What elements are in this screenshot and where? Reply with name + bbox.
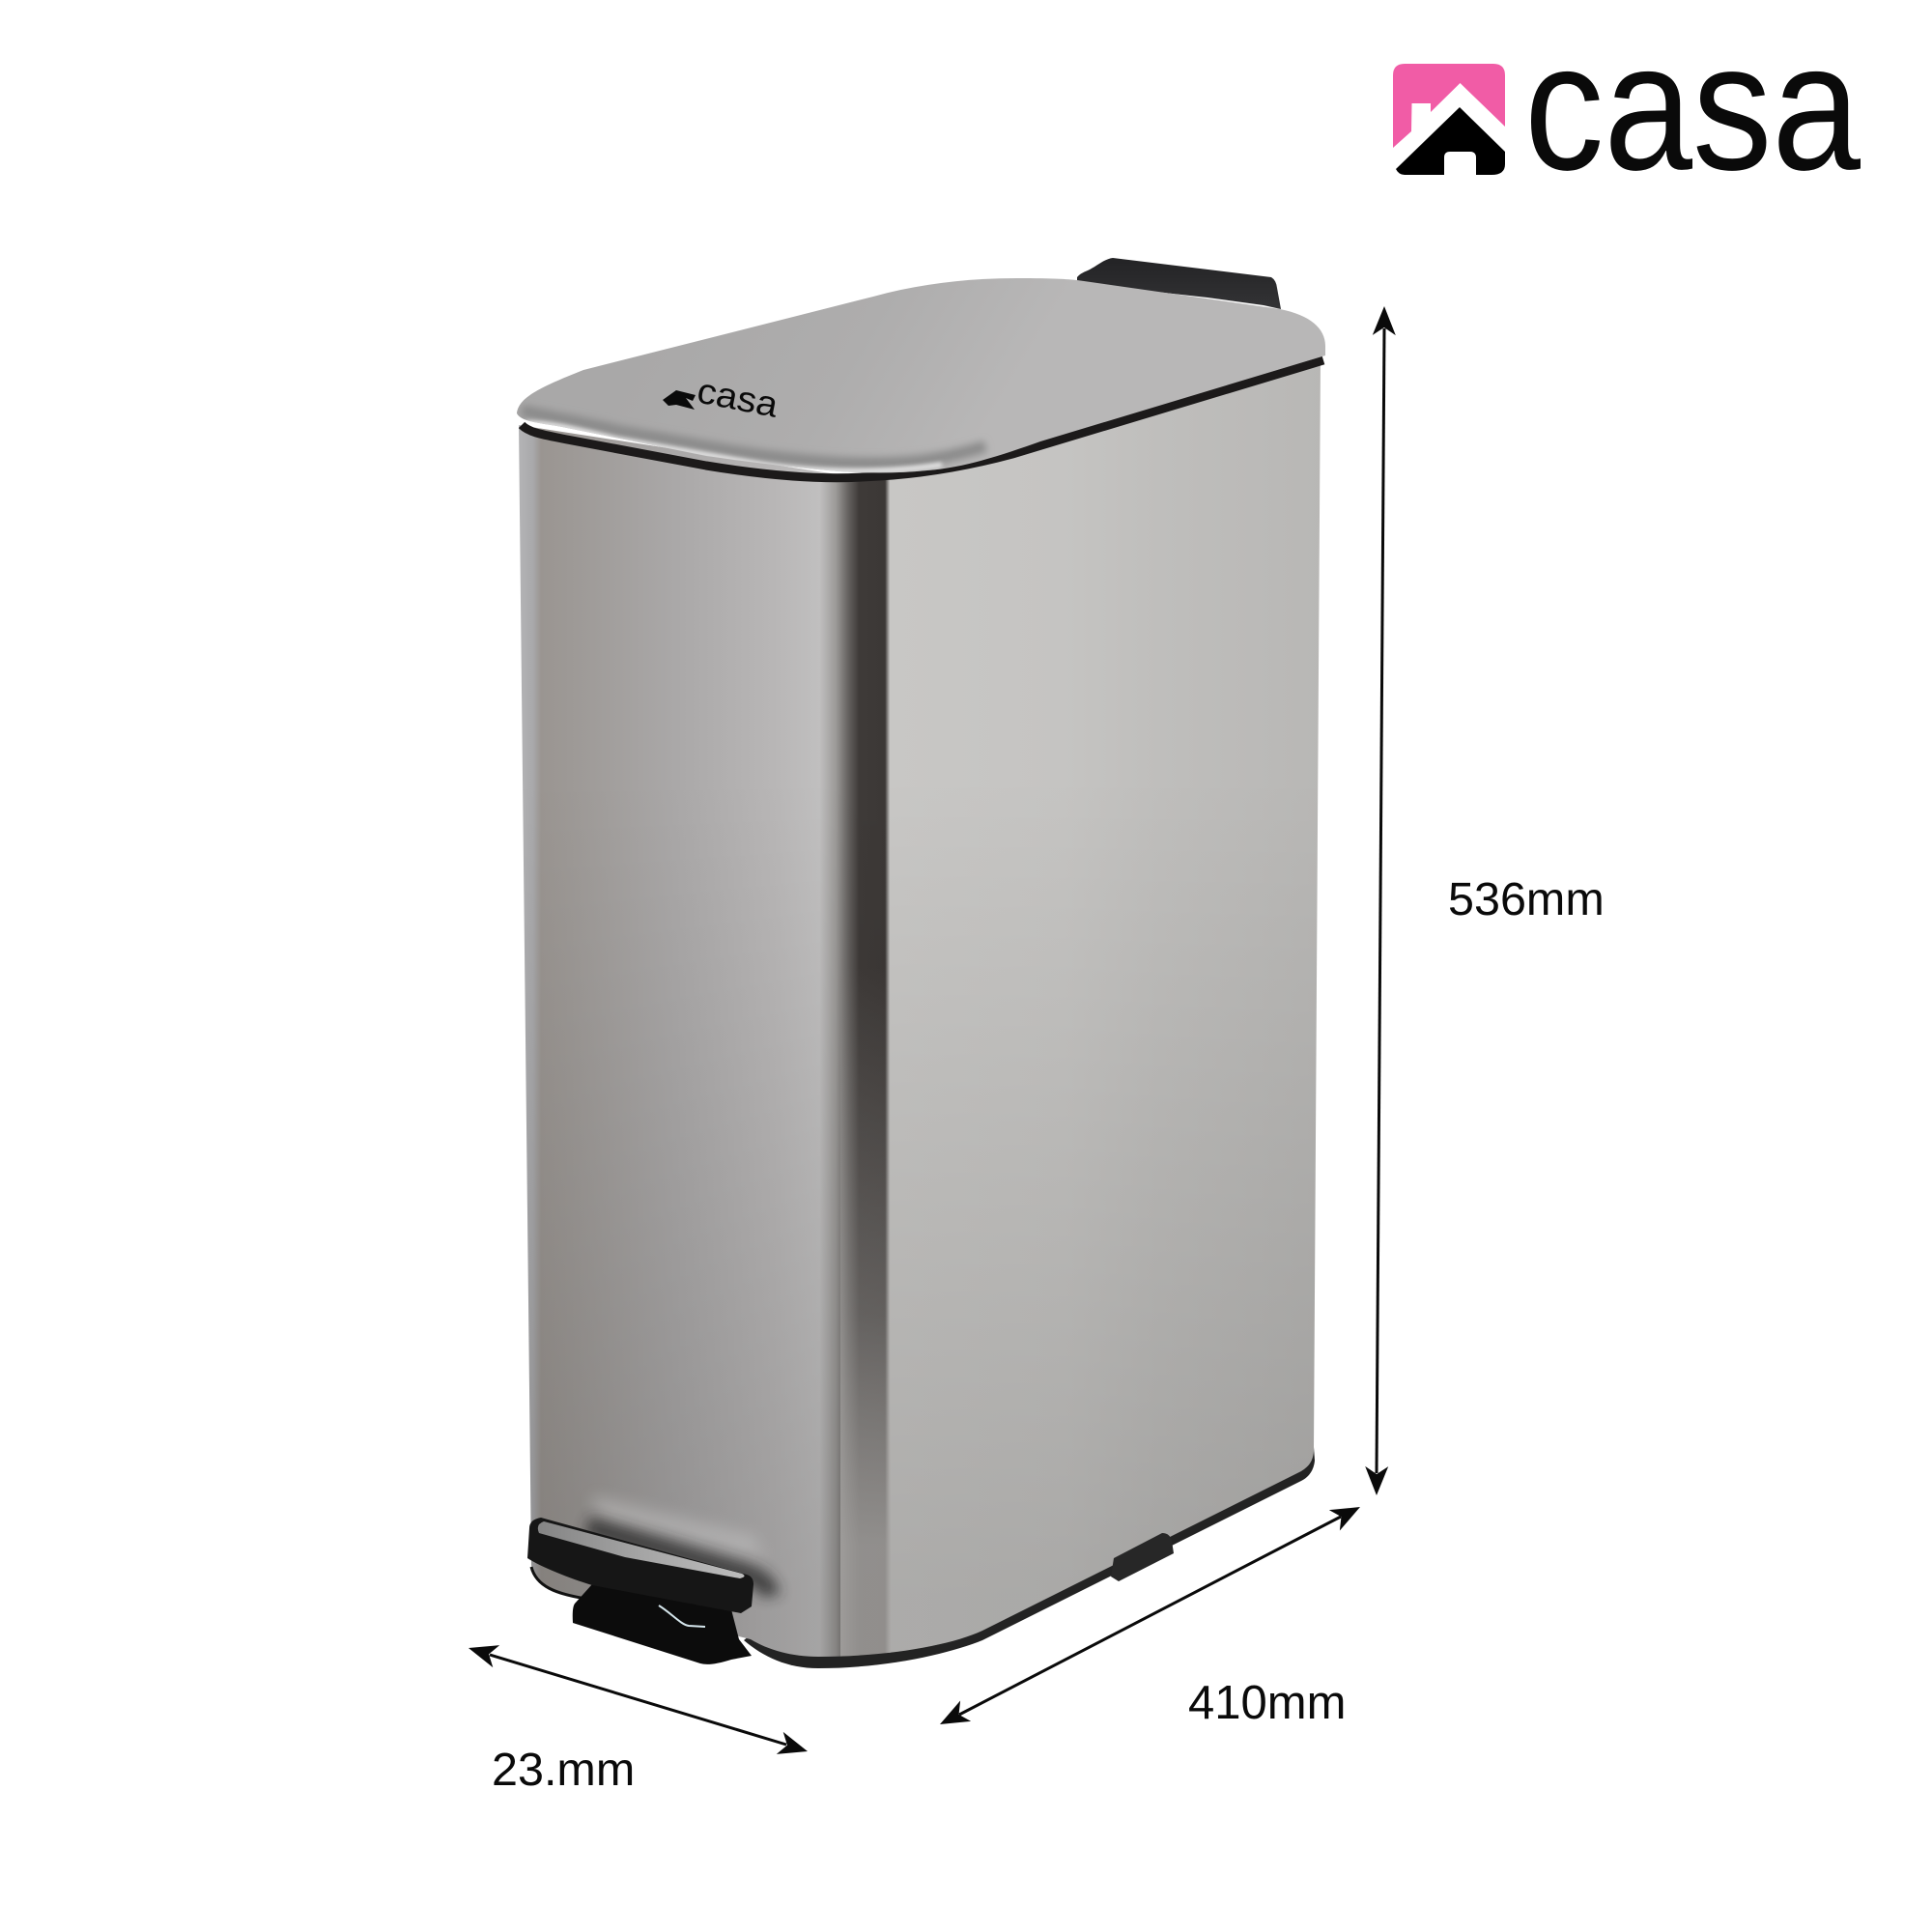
bin body (519, 359, 1321, 1662)
label: height: 536mm (1448, 873, 1605, 925)
dimension arrow: depth (466, 1637, 810, 1762)
bottom foot stop (1111, 1533, 1174, 1581)
lid logo wordmark: casa (694, 371, 781, 425)
pedal lever (573, 1584, 752, 1664)
product: stainless steel pedal bin (517, 258, 1325, 1668)
bin base seal (744, 1447, 1315, 1668)
logo icon: pink square with house (1393, 64, 1505, 175)
foot pedal (527, 1518, 753, 1664)
lid logo icon (663, 390, 696, 410)
lid (517, 278, 1325, 472)
pedal spring highlight (659, 1605, 705, 1627)
gap arc behind pedal (531, 1567, 586, 1599)
lid logo (663, 371, 781, 425)
dimension arrow: width (934, 1496, 1366, 1735)
brand logo: casa (1393, 5, 1861, 208)
lid handle (1077, 258, 1281, 309)
dimension arrow: height (1365, 306, 1396, 1495)
logo wordmark: casa (1524, 5, 1861, 208)
label: width: 410mm (1188, 1677, 1346, 1729)
label: depth: 23.mm (492, 1744, 635, 1796)
lid seal (522, 360, 1323, 478)
pedal steel plate (538, 1521, 745, 1578)
pedal cap (527, 1518, 753, 1613)
